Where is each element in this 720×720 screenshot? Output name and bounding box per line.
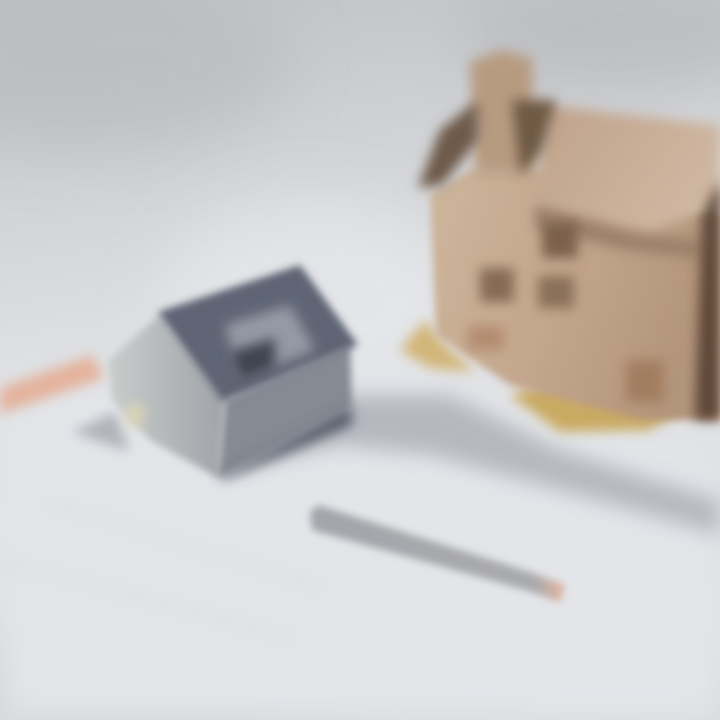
roof [158,265,358,402]
eave line [535,205,700,258]
door highlight [126,403,144,427]
roof [535,105,720,232]
roof highlights [225,305,315,380]
right house wall [430,170,720,420]
right corner shadow [695,180,720,420]
base shadow [218,405,352,480]
paper surface [0,360,720,720]
windows [468,222,664,402]
wall [108,315,225,478]
chimney [470,50,535,175]
grey pencil [310,505,565,602]
orange pencil [0,355,104,414]
right wall [218,345,352,478]
shadow of houses [72,395,720,535]
small house with dark roof [108,265,358,480]
foundation: gold coins [400,320,690,432]
dark roof edge left [418,100,478,188]
dark roof edge right [512,100,556,175]
large tan house [400,50,720,432]
